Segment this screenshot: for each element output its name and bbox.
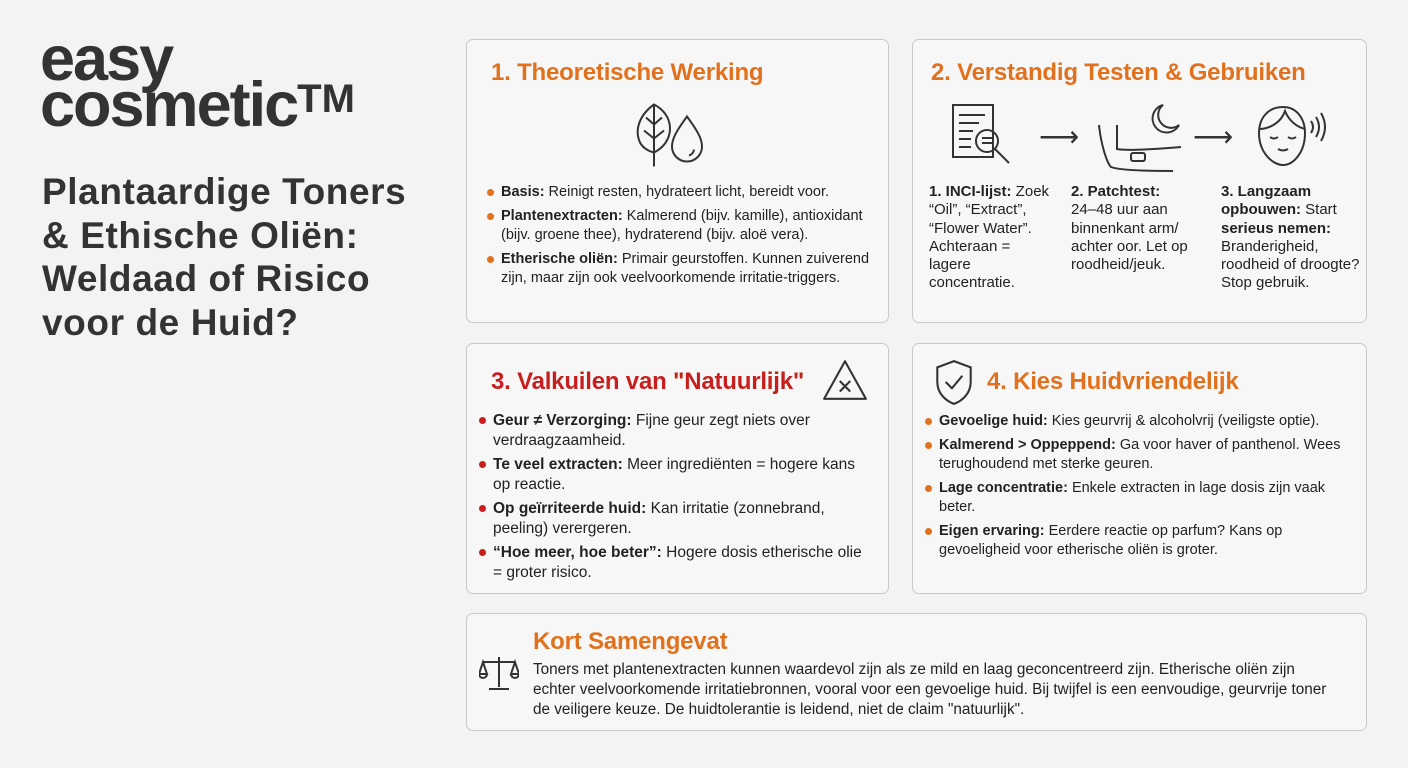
bullets: Plantenextracten: Kalmerend (bijv. kamille), antioxidant (bijv. groene thee), hydraterend (bijv. aloë vera). xyxy=(501,208,863,243)
bullets: Eigen ervaring: Eerdere reactie op parfum? Kans op gevoeligheid voor etherische oliën is groter. xyxy=(939,523,1282,558)
heading: 1. Theoretische Werking xyxy=(491,59,763,86)
logo xyxy=(40,24,355,140)
bullets xyxy=(925,413,1340,558)
bullets xyxy=(479,412,862,581)
bullets: Basis: Reinigt resten, hydrateert licht, bereidt voor. xyxy=(501,184,829,200)
panel: kort samengevat xyxy=(466,613,1367,731)
panel: theoretische werking xyxy=(466,39,889,323)
bullets: Op geïrriteerde huid: Kan irritatie (zonnebrand, peeling) verergeren. xyxy=(493,500,825,537)
panel: verstandig testen: 24–48 uur aan binnenkant arm/ achter oor. Let op roodheid/jeuk. xyxy=(1071,201,1188,273)
heading: 2. Verstandig Testen & Gebruiken xyxy=(931,59,1306,86)
arrow: ⟶ xyxy=(1039,121,1079,152)
summary text: Toners met plantenextracten kunnen waardevol zijn als ze mild en laag geconcentreerd zijn. Etherische oliën zijn echter veelvoorkomende irritatiebronnen, vooral voor een gevoelige huid. Bij twijfel is een eenvoudige, geurvrije toner de veiligere keuze. De huidtolerantie is leidend, niet de claim "natuurlijk". xyxy=(533,661,1326,718)
panel: verstandig testen: 3. Langzaam opbouwen: Start serieus nemen: Branderigheid, roodheid of droogte? Stop gebruik. xyxy=(1221,183,1359,291)
panel: verstandig testen xyxy=(912,39,1367,323)
step texts: 1. INCI-lijst: Zoek “Oil”, “Extract”, “Flower Water”. Achteraan = xyxy=(929,183,1049,255)
panel: valkuilen xyxy=(466,343,889,594)
bullets: Geur ≠ Verzorging: Fijne geur zegt niets over verdraagzaamheid. xyxy=(493,412,810,449)
icon: arm with patch and moon xyxy=(1098,104,1182,172)
headline: & Ethische Oliën: xyxy=(42,214,359,256)
icon: face xyxy=(1258,106,1326,166)
bullets: Te veel extracten: Meer ingrediënten = hogere kans op reactie. xyxy=(493,456,855,493)
bullets: “Hoe meer, hoe beter”: Hogere dosis etherische olie = groter risico. xyxy=(493,544,862,581)
icon: leaf and drop xyxy=(636,103,703,166)
arrow: ⟶ xyxy=(1193,121,1233,152)
bullets: Gevoelige huid: Kies geurvrij & alcoholvrij (veiligste optie). xyxy=(939,413,1319,429)
headline: voor de Huid? xyxy=(42,302,299,342)
step texts xyxy=(929,183,1049,291)
panel: kies huidvriendelijk xyxy=(912,343,1367,594)
headline xyxy=(42,171,406,342)
step texts: lagere concentratie. xyxy=(929,256,1015,291)
icon: scales xyxy=(479,657,519,690)
icon: shield check xyxy=(936,360,972,405)
headline: Plantaardige Toners xyxy=(42,171,406,212)
logo: cosmeticTM xyxy=(40,70,355,140)
bullets: Etherische oliën: Primair geurstoffen. Kunnen zuiverend zijn, maar zijn ook veelvoorkomende irritatie-triggers. xyxy=(501,251,869,286)
icon: document with magnifier xyxy=(952,104,1010,164)
logo: easy xyxy=(40,24,172,94)
bullets: Lage concentratie: Enkele extracten in lage dosis zijn vaak beter. xyxy=(939,480,1325,515)
headline: Weldaad of Risico xyxy=(42,258,370,299)
bullets xyxy=(487,184,869,286)
icon: warning triangle xyxy=(823,360,867,400)
panel: verstandig testen: 2. Patchtest: xyxy=(1071,183,1160,200)
bullets: Kalmerend > Oppeppend: Ga voor haver of panthenol. Wees terughoudend met sterke geuren. xyxy=(939,437,1340,472)
heading: Kort Samengevat xyxy=(533,628,727,655)
heading: 3. Valkuilen van "Natuurlijk" xyxy=(491,368,804,395)
heading: 4. Kies Huidvriendelijk xyxy=(987,368,1238,395)
